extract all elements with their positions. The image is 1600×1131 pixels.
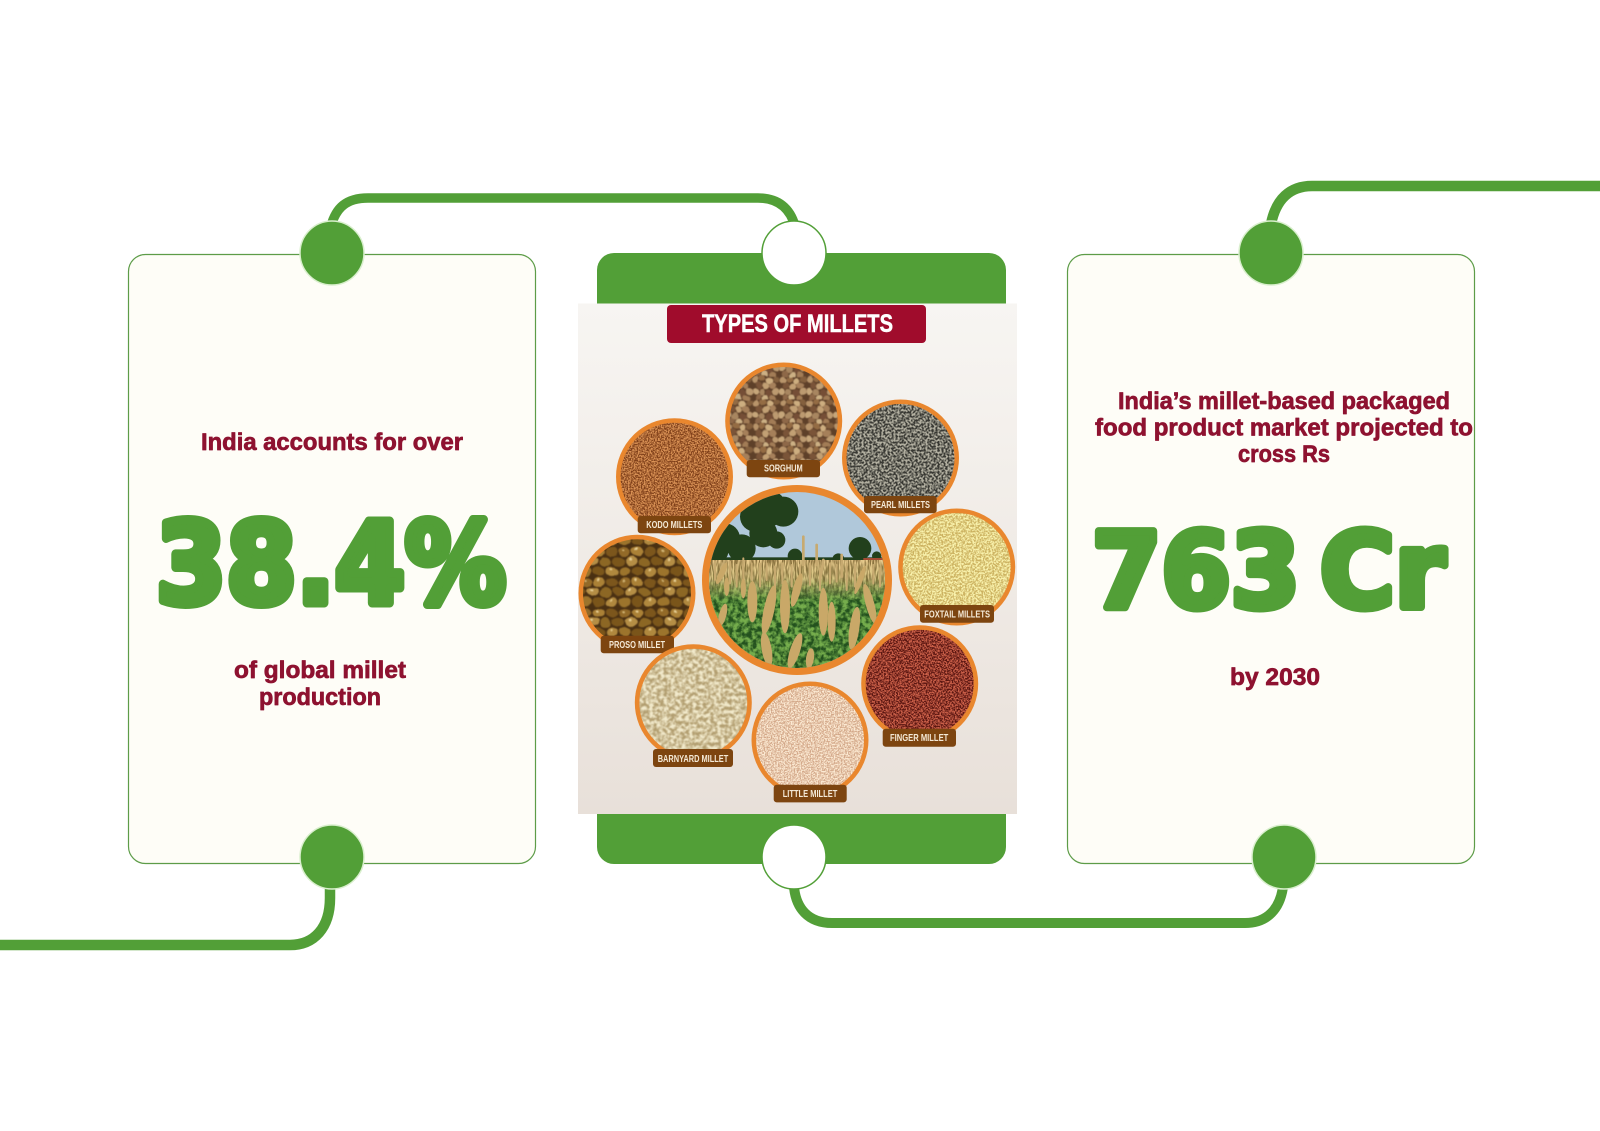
- text: of global millet production: production: [259, 684, 381, 711]
- connector: top right card to page edge: [1271, 186, 1600, 224]
- poster heading: TYPES OF MILLETS: [702, 310, 893, 338]
- millet: sorghum: SORGHUM: [764, 463, 803, 475]
- connector: bottom left card to page edge: [0, 885, 330, 945]
- millet: pearl: [842, 400, 959, 516]
- stat: 763 Cr: Cr: [1320, 510, 1445, 632]
- marker: bottom right: [1252, 825, 1316, 889]
- text: market projection: [1095, 388, 1473, 468]
- poster heading: [667, 305, 926, 343]
- stat: 763 Cr: 763: [1092, 510, 1300, 632]
- text: of global millet production: [234, 657, 406, 711]
- millet: proso: PROSO MILLET: [609, 639, 665, 651]
- connector: centre panel to bottom right card: [794, 887, 1283, 923]
- stat: 38.4%: 38.4%: [156, 500, 506, 630]
- text: by 2030: by 2030: [1230, 664, 1320, 691]
- marker: top left: [300, 221, 364, 285]
- millet: foxtail: [898, 508, 1015, 626]
- millet: proso: [578, 534, 696, 654]
- stat: 763 Cr: [1092, 510, 1445, 632]
- millet: barnyard: BARNYARD MILLET: [658, 753, 729, 765]
- photo: millet field: [700, 485, 895, 677]
- millet: little: LITTLE MILLET: [783, 788, 838, 800]
- millet: pearl: PEARL MILLETS: [871, 499, 930, 511]
- text: market projection: food product market projected to: [1095, 414, 1473, 442]
- panel: right stat card: [1068, 254, 1474, 864]
- text: of global millet production: of global millet: [234, 657, 406, 684]
- marker: bottom centre: [762, 825, 826, 889]
- panel: types of millets poster: [573, 304, 1017, 814]
- millet: foxtail: FOXTAIL MILLETS: [924, 609, 990, 621]
- millet: sorghum: [725, 362, 842, 480]
- millet: barnyard: [635, 644, 752, 767]
- text: India accounts for over: India accounts for over: [201, 429, 463, 456]
- panel: left stat card: [128, 254, 536, 864]
- connector: top left card to centre panel: [331, 198, 795, 226]
- millet: kodo: [616, 418, 733, 535]
- marker: bottom left: [300, 825, 364, 889]
- text: market projection: cross Rs: [1238, 441, 1330, 468]
- panel: centre green backing: [597, 253, 1006, 864]
- text: market projection: India’s millet-based packaged: [1118, 388, 1450, 415]
- millet: finger: FINGER MILLET: [890, 732, 949, 744]
- millet: kodo: KODO MILLETS: [646, 519, 702, 531]
- millet: little: [752, 682, 868, 802]
- marker: top right: [1239, 221, 1303, 285]
- marker: top centre: [762, 221, 826, 285]
- millet: finger: [861, 625, 978, 747]
